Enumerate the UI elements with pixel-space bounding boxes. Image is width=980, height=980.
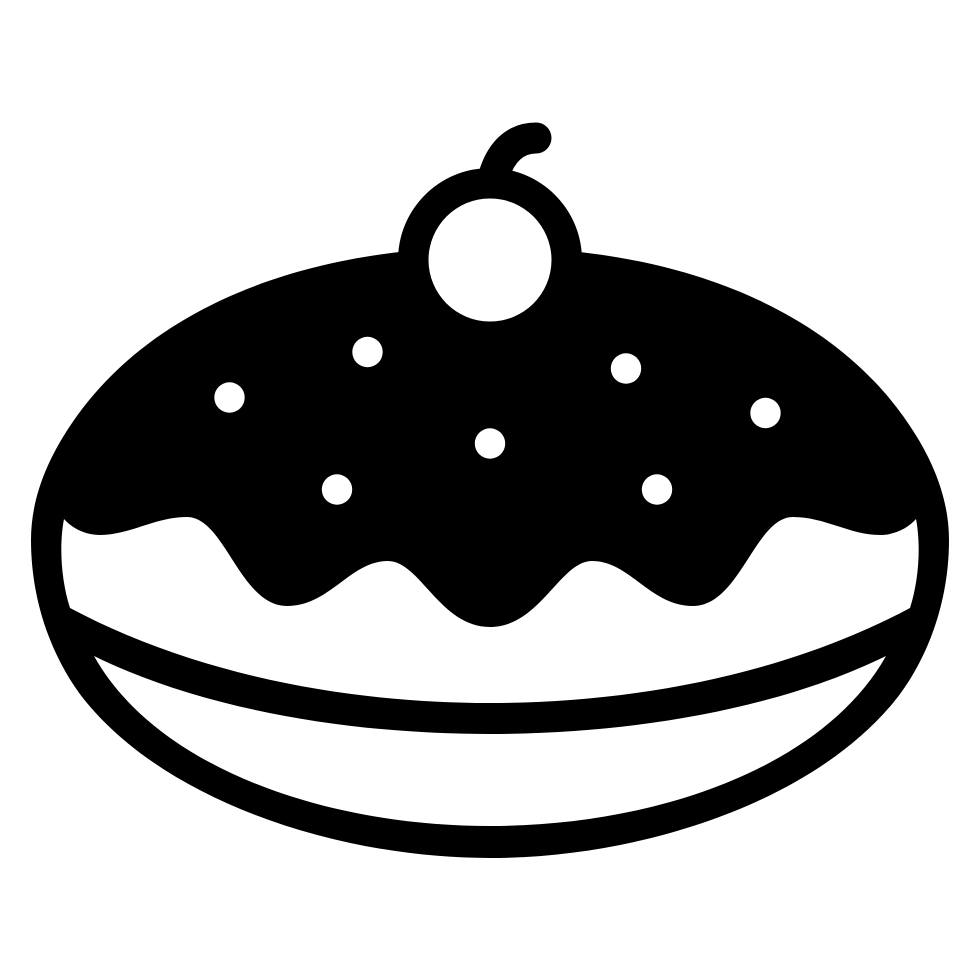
cherry highlight [428,198,552,322]
donut body silhouette [31,247,949,858]
lower dough band [94,656,886,826]
cream band [61,517,919,703]
sprinkles [214,337,781,505]
cherry outline [398,168,582,352]
cherry stem [495,138,536,172]
